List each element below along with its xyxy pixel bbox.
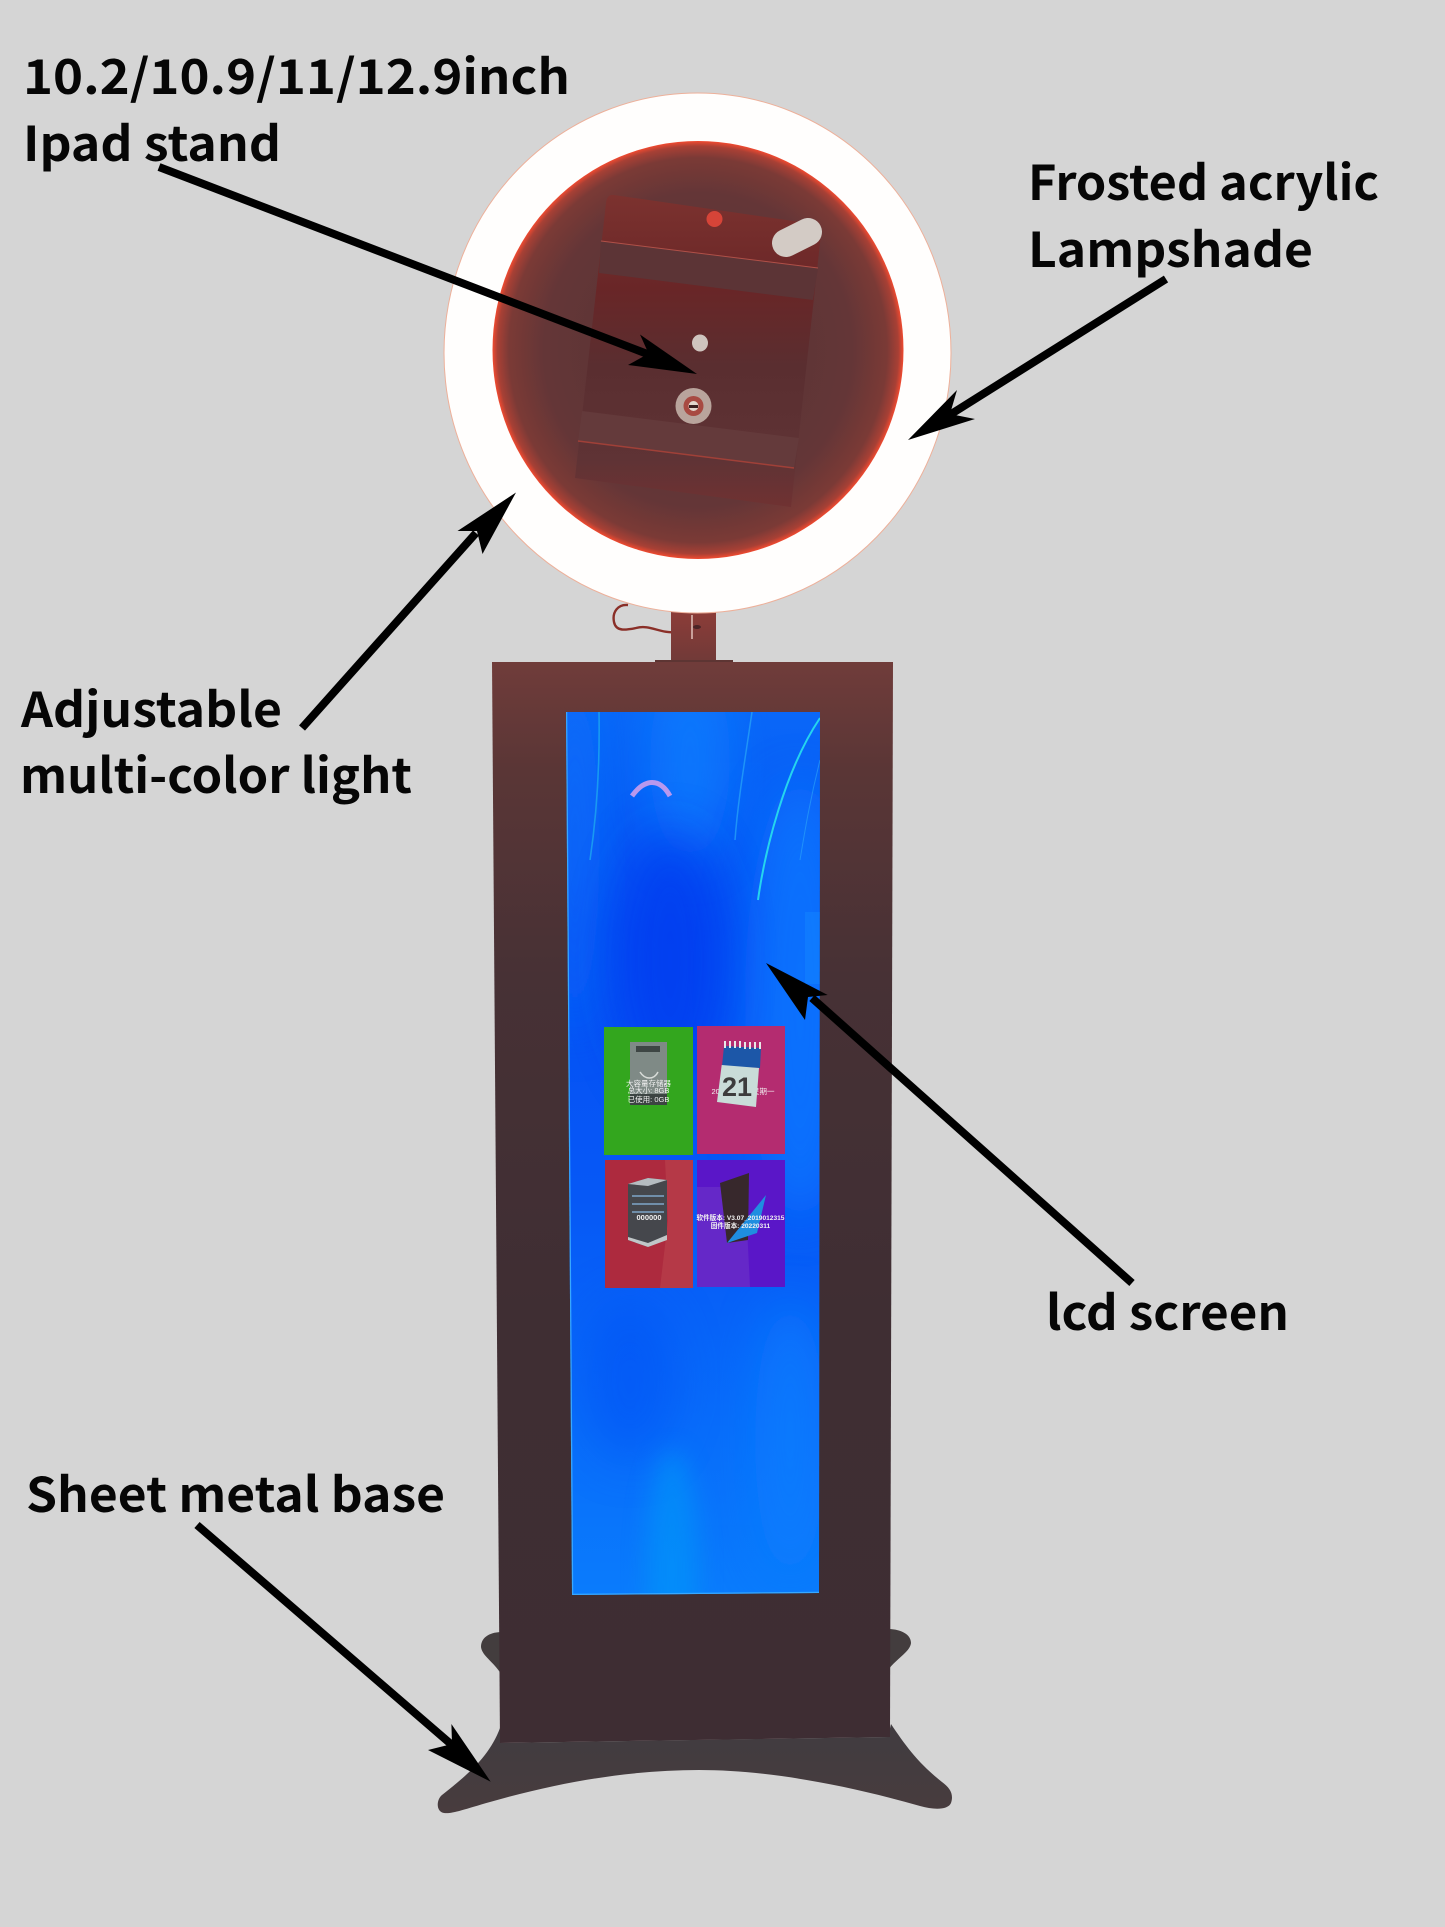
label: ipad stand: Ipad stand bbox=[23, 105, 281, 175]
label: frosted acrylic lampshade: Frosted acrylic bbox=[1028, 144, 1379, 214]
tile: version: 固件版本: 20220311 bbox=[711, 1221, 771, 1230]
lcd screen bbox=[566, 712, 820, 1595]
label: lcd screen: lcd screen bbox=[1046, 1274, 1289, 1344]
red indicator bbox=[706, 211, 722, 227]
arrow: ipad stand bbox=[159, 167, 697, 374]
lens mount bbox=[676, 388, 712, 424]
tile: storage: 已使用: 0GB bbox=[628, 1094, 669, 1104]
tile: device: 000000 bbox=[636, 1213, 662, 1222]
label: adjustable multi-color light: Adjustable bbox=[20, 671, 282, 741]
arrow: frosted lampshade bbox=[908, 279, 1166, 440]
tile: storage bbox=[604, 1027, 693, 1155]
tile: storage: 总大小: 8GB bbox=[628, 1085, 669, 1095]
frosted lampshade bbox=[444, 93, 951, 613]
tile: version: 软件版本: V3.07_2019012315 bbox=[697, 1213, 785, 1222]
inner disk with tablet mount bbox=[492, 141, 904, 559]
tile: calendar: 2022-03-21 星期一 bbox=[712, 1087, 775, 1096]
arrow: lcd screen bbox=[766, 963, 1132, 1283]
tile: calendar bbox=[697, 1026, 785, 1154]
tile: calendar: 21 bbox=[722, 1072, 752, 1102]
label: frosted acrylic lampshade: Lampshade bbox=[1028, 211, 1313, 281]
ipad plate bbox=[575, 195, 821, 507]
arrow: adjustable light bbox=[302, 492, 516, 728]
cabinet body bbox=[492, 662, 893, 1743]
sensor bbox=[692, 334, 708, 352]
cable bbox=[614, 605, 676, 632]
tile: storage: 大容量存储器 bbox=[626, 1078, 671, 1088]
loading arc bbox=[632, 782, 670, 796]
cabinet with screen bbox=[492, 660, 893, 1743]
light ring bbox=[444, 93, 951, 613]
label: ipad stand: 10.2/10.9/11/12.9inch bbox=[23, 38, 570, 108]
label: sheet metal base: Sheet metal base bbox=[26, 1456, 445, 1526]
tile: version bbox=[697, 1160, 785, 1287]
ring neck bbox=[655, 610, 733, 663]
oval cutout bbox=[786, 232, 808, 243]
base plate bbox=[438, 1629, 952, 1813]
arrow: sheet metal base bbox=[197, 1525, 491, 1782]
label: adjustable multi-color light: multi-color light bbox=[20, 737, 412, 807]
tile: device bbox=[605, 1160, 693, 1288]
